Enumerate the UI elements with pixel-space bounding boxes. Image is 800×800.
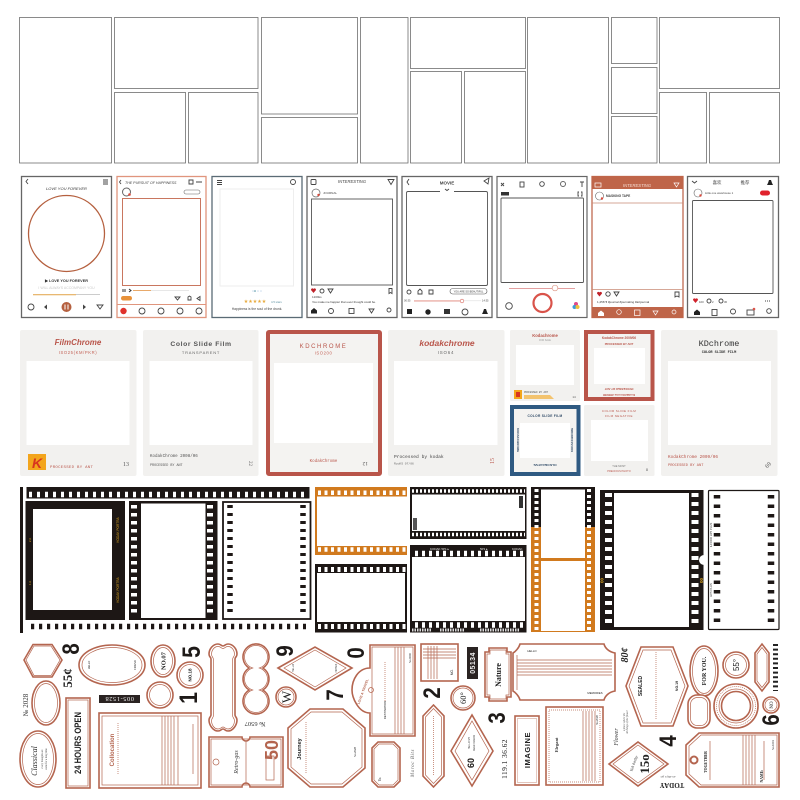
panel: small red border mount xyxy=(586,332,652,399)
label: small chamfered tag xyxy=(372,742,400,787)
panel: music player phone frame: LOVE YOU FOREVER xyxy=(46,186,87,191)
panel: kodakchrome slide mount xyxy=(388,330,504,476)
label: airline tag: DESTINATION xyxy=(383,701,387,719)
panel: FilmChrome slide mount: FilmChrome xyxy=(55,338,102,347)
label: for you oval xyxy=(690,646,718,696)
panel: movie phone frame xyxy=(402,176,492,318)
panel: small red border mount: KodakChrome 2009/06 xyxy=(602,336,636,340)
label: wide notched ticket: MEMORIES xyxy=(587,691,603,695)
top perforated strip xyxy=(26,487,310,498)
label: diamond 15: Yuh birthy xyxy=(628,755,639,772)
label: elongated hexagon xyxy=(423,705,444,787)
label: elegant card: Elegant xyxy=(554,737,559,753)
label: diamond 60: 60 xyxy=(466,758,476,768)
label: small lined square xyxy=(421,644,458,681)
panel: KDchrome mount xyxy=(661,330,778,476)
label: together tag: NAME: xyxy=(760,770,764,782)
serial number 6507: № 6507 xyxy=(244,720,265,727)
panel: small Kodachrome mount: 14 xyxy=(572,395,576,399)
panel: KDchrome mount: PROCESSED BY ANT xyxy=(668,464,704,468)
decorative hatch strip xyxy=(773,644,778,691)
label: collocation card xyxy=(99,713,201,788)
panel: FilmChrome slide mount: 13 xyxy=(123,462,129,468)
panel: KDchrome mount: KodakChrome 2009/06 xyxy=(668,455,718,460)
label: diamond 60 xyxy=(451,715,493,786)
panel: Color Slide Film mount: 22 xyxy=(247,461,252,466)
label: NO.07 oval xyxy=(151,645,175,677)
panel: FilmChrome slide mount: K xyxy=(32,455,43,471)
label: oval hello xyxy=(79,645,145,685)
panel: kodakchrome slide mount: 15 xyxy=(490,458,496,464)
black border frame: 1 A xyxy=(28,581,32,585)
panel: small Kodachrome mount: PROCESSED BY ANT xyxy=(524,391,549,394)
label: diamond 15 xyxy=(609,742,668,786)
circular photo window xyxy=(28,196,104,272)
film frame: black landscape xyxy=(315,564,407,632)
label: diamond 60: HELLO MY xyxy=(468,737,471,749)
flower note: Flower xyxy=(614,728,620,747)
panel: movie phone frame: MOVIE xyxy=(440,180,454,186)
panel: KDchrome mount: 69 xyxy=(764,461,773,470)
panel: kodakchrome slide mount: Processed by kodak xyxy=(394,454,444,460)
label: collocation card: Collocation xyxy=(110,733,116,766)
panel: small Kodachrome mount: FOR SALE xyxy=(539,339,551,342)
coordinates: 119.1 36.62 xyxy=(500,739,509,779)
panel: KDchrome mount: KDchrome xyxy=(699,339,739,349)
label: nature xyxy=(485,648,511,701)
panel: gallery phone frame xyxy=(212,176,302,318)
label: wide notched ticket: HELLO xyxy=(527,649,537,653)
label: diamond: HELLO xyxy=(292,664,295,672)
panel: short video phone frame: 2 xyxy=(712,300,714,304)
label: oval hello: HELLO xyxy=(87,661,91,669)
section: labels and numbers xyxy=(20,643,784,789)
panel: gallery phone frame: Happiness is the soul of the drunk. xyxy=(232,307,282,311)
panel: KDchrome mount: COLOR SLIDE FILM xyxy=(702,351,736,355)
panel: Color Slide Film mount xyxy=(143,330,258,476)
film frame: black landscape large xyxy=(410,545,526,632)
serial number 2028: № 2028 xyxy=(22,693,30,716)
film frame: thin black landscape xyxy=(410,487,526,539)
bottom perforations xyxy=(31,624,306,629)
number 9: 9 xyxy=(271,645,298,657)
label: W circle xyxy=(276,687,296,707)
panel: short video phone frame: 30 xyxy=(724,300,728,304)
panel: camera phone frame xyxy=(497,176,587,318)
panel: small Kodachrome mount xyxy=(510,330,580,401)
label: 55 degree circle: 55° xyxy=(732,659,741,671)
perforated black frame xyxy=(129,501,218,620)
panel: kodakchrome slide mount: ISO64 xyxy=(438,350,454,355)
panel: KDCHROME slide mount xyxy=(268,332,380,474)
panel: FilmChrome slide mount: PROCESSED BY ANT xyxy=(50,466,94,470)
panel: small Kodachrome mount: Kodachrome xyxy=(532,333,558,338)
label: large ring xyxy=(714,684,758,728)
label: imagine xyxy=(515,716,539,785)
film frame: outlined vertical perforated: ILFORD HP5 PLUS xyxy=(709,523,713,547)
number 3: 3 xyxy=(483,712,510,724)
panel: Color Slide Film mount: TRANSPARENT xyxy=(182,350,220,355)
film frame: orange landscape xyxy=(315,487,407,555)
label: elegant card xyxy=(546,707,603,785)
panel: KDCHROME slide mount: 12 xyxy=(362,460,368,466)
label: airline tag: No.0000 xyxy=(408,653,412,663)
price 80 cents: 80¢ xyxy=(620,648,631,662)
panel: short video phone frame: 喜欢 xyxy=(713,179,722,186)
panel: small negative mount: COLOR SLIDE FILM xyxy=(602,409,636,413)
label: tall narrow hexagon xyxy=(755,644,769,691)
label: plain vertical oval xyxy=(32,681,60,725)
black border frame: KODAK PORTRA xyxy=(116,516,120,543)
film frame: black vertical with gold marks xyxy=(600,490,709,630)
label: NO.07 oval: NO.07 xyxy=(160,651,168,670)
film frame: black landscape large: KODAK xyxy=(512,547,523,551)
handwritten note: Maroc Bits xyxy=(411,749,416,778)
black border frame: 2 A xyxy=(28,538,32,542)
panel: small negative mount xyxy=(584,405,654,476)
today upside down xyxy=(660,775,684,789)
dark label 005-1528: 005-1528 xyxy=(105,695,134,702)
panel: blank outlined photo frames xyxy=(20,18,780,163)
panel: small negative mount: 8 xyxy=(646,468,648,472)
label: 24 hours open: 24 HOURS OPEN xyxy=(72,712,83,774)
label: diamond 15: 15o xyxy=(637,754,652,774)
panel: short video phone frame: Little one warehouse 1 xyxy=(705,191,734,195)
label: classical oval: some for a long time xyxy=(45,747,48,770)
label: rounded rectangle xyxy=(688,695,710,728)
film frame: black vertical with gold marks: 00 xyxy=(600,577,604,583)
panel: social feed phone frame xyxy=(307,176,397,318)
label: journey octagon: No.2028 xyxy=(353,747,357,757)
panel: kodakchrome slide mount: kodakchrome xyxy=(419,338,475,348)
label: NO circle: NO xyxy=(770,701,775,709)
panel: social feed phone frame red: INTERESTING xyxy=(623,183,652,188)
dark label 005-1528 xyxy=(99,695,140,703)
number 0: 0 xyxy=(342,647,369,659)
panel: short video phone frame: 推荐 xyxy=(741,179,750,186)
panel: KDCHROME slide mount: KDCHROME xyxy=(300,344,347,350)
label: ticket 50 xyxy=(209,737,283,787)
panel: movie phone frame: 14:35 xyxy=(482,298,489,302)
label: together tag: TOGETHER xyxy=(704,751,708,773)
label: classical oval xyxy=(20,731,56,787)
film frame: outlined vertical perforated: HP5 PLUS xyxy=(709,583,713,597)
panel: movie phone frame: 00:35 xyxy=(404,298,411,302)
label: sealed hexagon: NO.19 xyxy=(675,681,679,691)
label: for you oval: FOR YOU. xyxy=(702,656,708,685)
label: nature: Nature xyxy=(494,663,503,687)
label: diamond 60: DEAR FRIEND xyxy=(473,735,476,751)
panel: music player phone frame: I WILL ALWAYS ACCOMPANY YOU xyxy=(38,286,95,290)
panel: small negative mount: PRECIOUS PHOTO xyxy=(607,469,631,473)
today upside down: TODAY xyxy=(660,781,684,789)
panel: music player phone frame xyxy=(22,176,112,318)
panel: long film strip set xyxy=(20,487,310,633)
panel: small blue border mount xyxy=(512,407,578,474)
number 1: 1 xyxy=(174,692,202,704)
panel: small red border mount: PROCESSED BY ANT xyxy=(605,342,634,346)
label: small chamfered tag: To. xyxy=(378,777,382,781)
label: 24 hours open xyxy=(66,698,90,788)
film frame: half black half orange vertical xyxy=(531,487,595,632)
label: classical oval: Classical xyxy=(30,745,39,776)
film frame: black landscape large: 5P1 ▸ xyxy=(480,547,488,551)
black border frame: KODAK PORTRA xyxy=(116,576,120,603)
label: sealed hexagon: SEALED xyxy=(638,675,644,696)
number 8: 8 xyxy=(57,643,84,655)
panel: small blue border mount: COLOR SLIDE FILM xyxy=(528,414,562,418)
film frame: outlined vertical perforated xyxy=(708,490,779,630)
label: oval hello: FRIEND xyxy=(133,660,137,670)
label: imagine: IMAGINE xyxy=(523,732,532,768)
flower note: all things of the flower xyxy=(626,709,629,734)
label: ticket 50: 50 xyxy=(262,740,282,760)
label: W circle: W xyxy=(279,690,294,703)
label: NO.18 circle xyxy=(177,662,203,688)
label: plain circle xyxy=(147,682,173,708)
film frame: black landscape large: KODAK 5P1 ▸ xyxy=(430,547,450,551)
panel: small blue border mount: KODAKCHROME xyxy=(516,428,520,452)
panel: small red border mount: PROCESSED BY ANT xyxy=(604,387,633,391)
label: diamond: NOTES xyxy=(335,663,338,672)
panel: short video phone frame: 100 xyxy=(699,300,704,304)
label: elegant card: No.2028 xyxy=(596,715,599,725)
label: hexagon xyxy=(24,644,62,677)
label: airline tag: LOVE A TRAVEL xyxy=(357,678,369,705)
panel: social feed phone frame: You make me happier than ever thought could be. xyxy=(312,300,376,304)
panel: short video phone frame xyxy=(688,176,778,318)
price 55 cents: 55¢ xyxy=(60,668,75,688)
panel: social feed phone frame: INTERESTING xyxy=(338,179,367,184)
label: NO.18 circle: NO.18 xyxy=(188,668,192,682)
film frame: black vertical with gold marks: 00 xyxy=(699,577,704,583)
panel: small blue border mount: FILM NEGATIVE xyxy=(534,463,556,467)
label: scallop xyxy=(243,644,269,714)
dark label 05134: 05134 xyxy=(470,652,477,674)
flower note xyxy=(614,709,629,747)
flower note: a place where the xyxy=(623,712,626,731)
label: 60 degree circle: 60° xyxy=(458,692,468,704)
panel: small blue border mount: KODAKCHROME xyxy=(570,428,574,452)
black border frame xyxy=(26,501,125,620)
panel: small negative mount: FILM NEGATIVE xyxy=(605,414,633,418)
label: journey octagon xyxy=(288,709,365,787)
panel: movie phone frame: YOU ARE SO BEAUTIFUL xyxy=(454,290,484,293)
panel: video app phone frame: THE PURSUIT OF HAPPINESS xyxy=(125,181,177,185)
panel: Color Slide Film mount: PROCESSED BY ANT xyxy=(150,464,183,468)
dark label 05134 xyxy=(467,647,478,679)
panel: FilmChrome slide mount xyxy=(20,330,136,476)
panel: video app phone frame xyxy=(117,176,206,318)
panel: FilmChrome slide mount: ISO25(KM/PKR) xyxy=(59,350,97,355)
label: wide notched ticket xyxy=(513,644,615,700)
panel: Color Slide Film mount: Color Slide Film xyxy=(170,341,232,348)
panel: small negative mount: THE MOST xyxy=(612,464,626,468)
number 4: 4 xyxy=(654,735,681,747)
label: 55 degree circle xyxy=(723,652,749,678)
panel: social feed phone frame: JOURNAL xyxy=(323,191,337,195)
label: journey octagon: Journey xyxy=(297,737,303,760)
number 7: 7 xyxy=(321,689,348,701)
label: together tag xyxy=(686,733,779,787)
label: tab plaque xyxy=(209,644,237,731)
panel: kodakchrome slide mount: RouKS 07/06 xyxy=(394,462,414,466)
panel: KDCHROME slide mount: KodakChrome xyxy=(310,459,338,464)
label: small lined square: NO. xyxy=(450,669,454,675)
panel: social feed phone frame red: 1,258 ♥ #journal #journaling #artjournal xyxy=(597,300,649,304)
number 2: 2 xyxy=(418,687,445,699)
outlined perforated frame xyxy=(223,502,310,619)
panel: KDCHROME slide mount: ISO200 xyxy=(315,350,332,356)
panel: gallery phone frame: 4.5 stars xyxy=(271,300,282,304)
panel: social feed phone frame red: MASKING TAPE xyxy=(606,194,630,198)
panel: social feed phone frame: 1209ks xyxy=(312,295,322,299)
label: ticket 50: Retro-gas xyxy=(234,750,240,775)
panel: gallery phone frame: ★★★★★ xyxy=(244,299,267,305)
label: sealed hexagon xyxy=(626,647,688,726)
label: classical oval: every thoughts are xyxy=(41,749,44,769)
today upside down: as days go xyxy=(660,775,675,779)
label: 60 degree circle xyxy=(451,686,475,710)
panel: social feed phone frame red xyxy=(592,176,683,318)
label: NO circle xyxy=(763,697,779,713)
number 5: 5 xyxy=(177,646,205,658)
label: together tag: No.1001 xyxy=(771,740,775,750)
label: airline tag xyxy=(352,645,415,736)
panel: Color Slide Film mount: KodakChrome 2008/06 xyxy=(150,454,198,459)
panel: small red border mount: KodakChrome 2009/06 xyxy=(603,393,635,397)
panel: music player phone frame: ▶ LOVE YOU FOREVER xyxy=(44,279,88,283)
label: diamond xyxy=(278,647,352,690)
number 6: 6 xyxy=(757,714,784,726)
